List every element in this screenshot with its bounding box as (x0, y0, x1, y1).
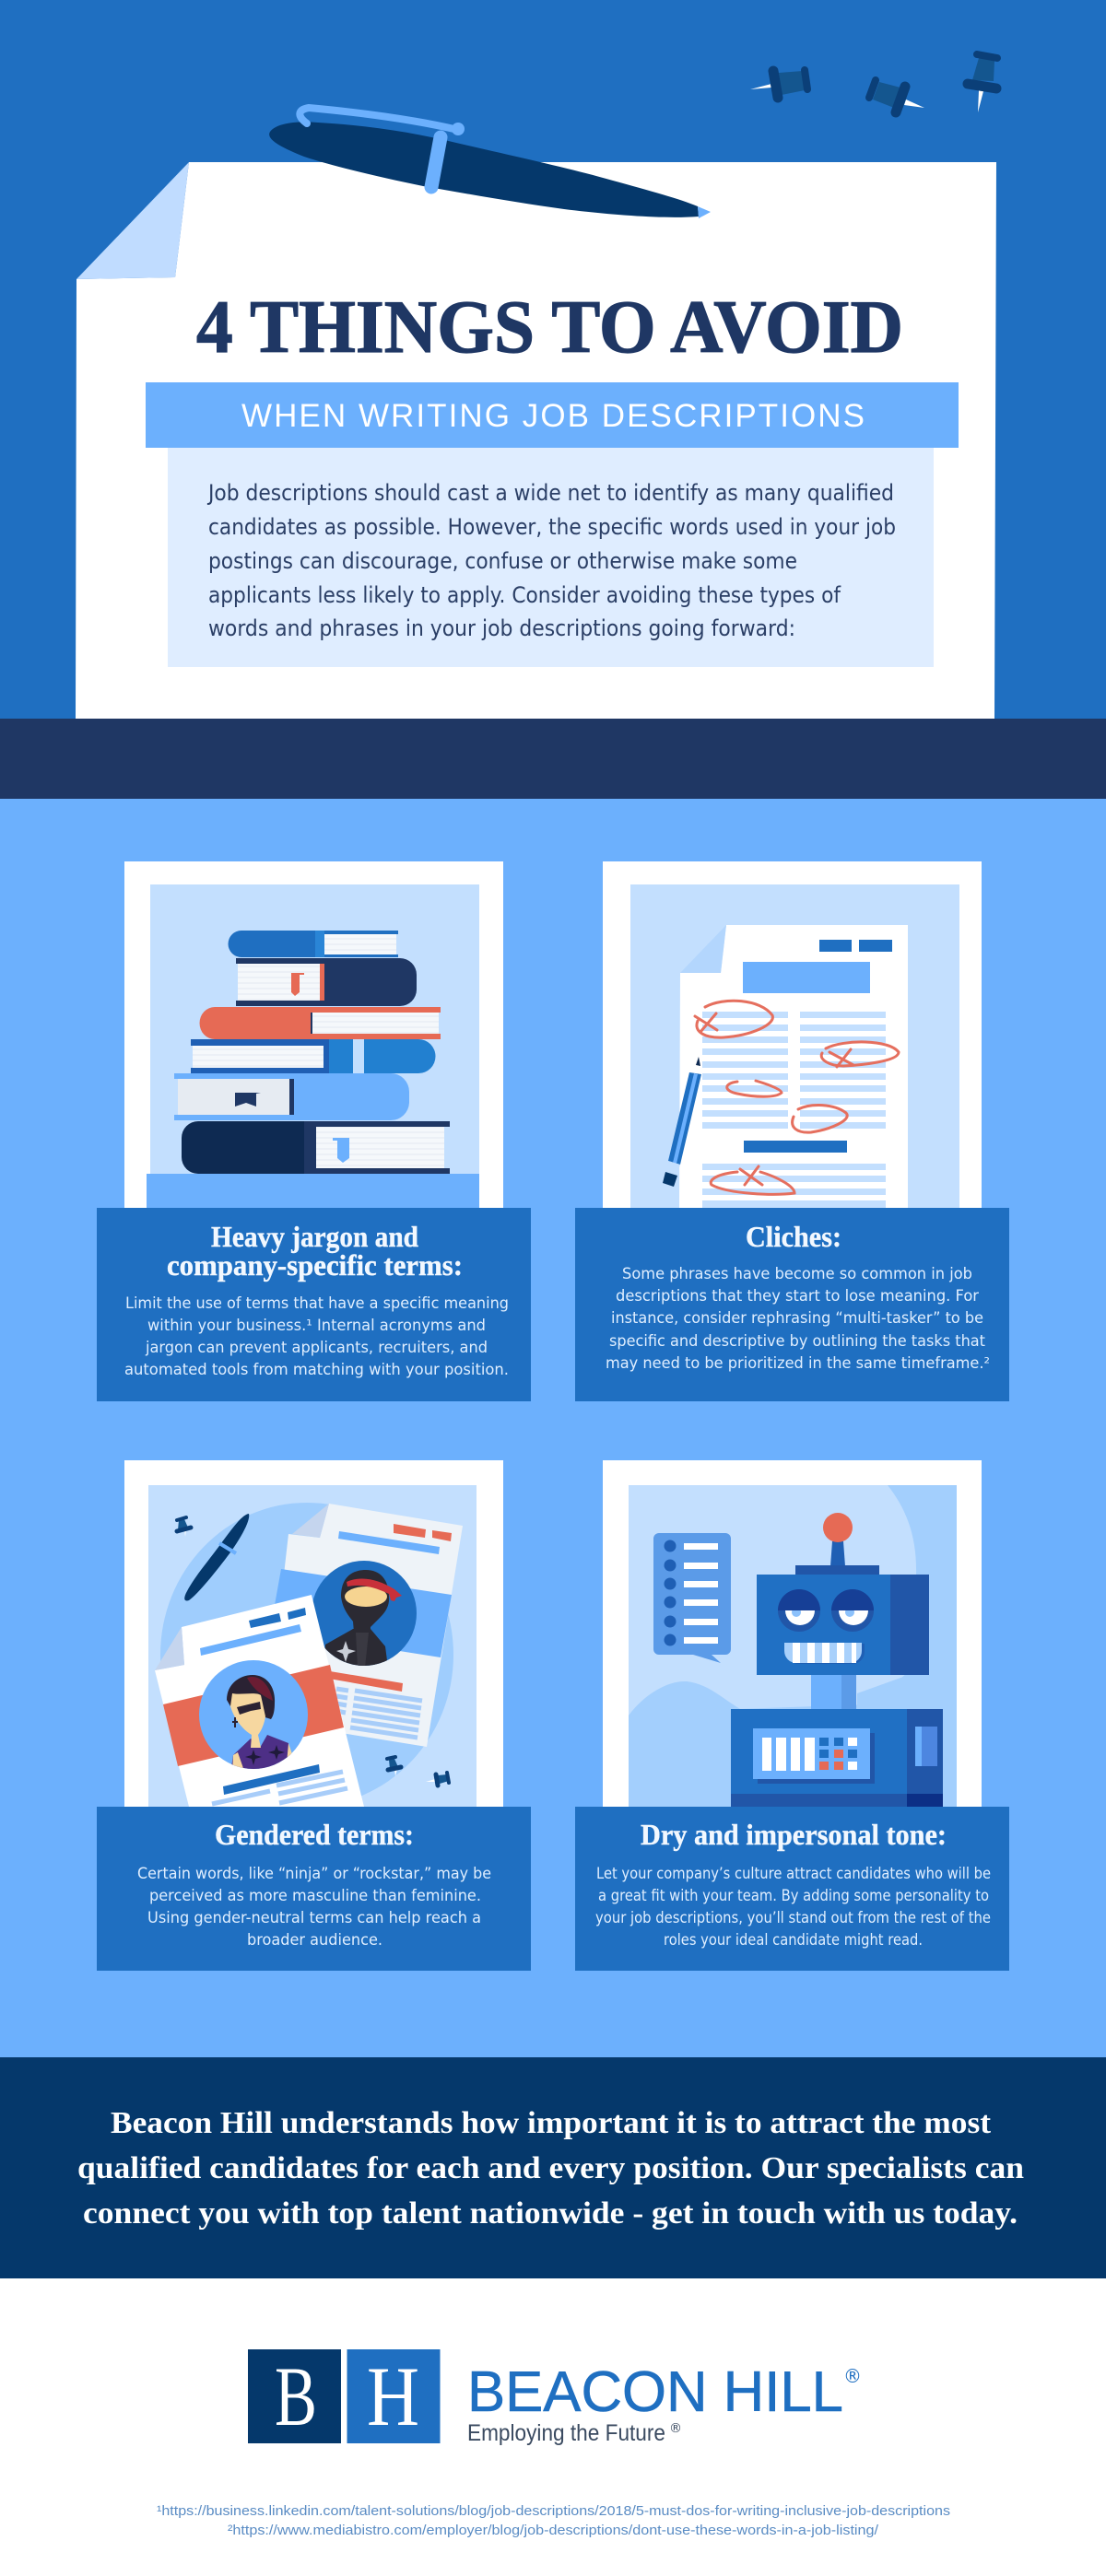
icon: small push pin 3 (426, 1773, 449, 1786)
dark band (0, 719, 1106, 799)
caption: a great fit with your team. By adding some personality to (598, 1887, 989, 1904)
caption: Gendered terms: (215, 1818, 414, 1851)
logo: Beacon Hill: ® (843, 2365, 862, 2387)
robot head (757, 1575, 929, 1675)
caption: instance, consider rephrasing “multi-tasker” to be (611, 1309, 983, 1327)
caption: perceived as more masculine than feminine. (149, 1887, 481, 1904)
footnotes: ¹https://business.linkedin.com/talent-solutions/blog/job-descriptions/2018/5-must-dos-for-writing-inclusive-job-descriptions (157, 2503, 950, 2519)
caption: broader audience. (247, 1931, 382, 1949)
front resume (155, 1595, 364, 1807)
intro text block (168, 448, 934, 667)
back resume (267, 1504, 463, 1747)
call to action band: qualified candidates for each and every position. Our specialists can (77, 2151, 1024, 2185)
call to action band: Beacon Hill understands how important it is to attract the most (111, 2106, 992, 2140)
call to action band (0, 2057, 1106, 2278)
caption: Let your company’s culture attract candidates who will be (596, 1865, 991, 1882)
illustration: robot (629, 1485, 957, 1807)
main light blue section background (0, 799, 1106, 2058)
illustration: resumes (155, 1503, 463, 1807)
icon: pencil (663, 1057, 701, 1187)
illustration: marked up document (663, 925, 908, 1208)
logo: Beacon Hill: Employing the Future (467, 2420, 665, 2446)
caption: Dry and impersonal tone: (641, 1818, 947, 1851)
caption: Using gender-neutral terms can help reach a (147, 1909, 481, 1926)
caption: specific and descriptive by outlining the tasks that (609, 1332, 986, 1350)
caption: roles your ideal candidate might read. (664, 1931, 923, 1949)
caption: descriptions that they start to lose meaning. For (616, 1287, 979, 1305)
caption: your job descriptions, you’ll stand out from the rest of the (595, 1909, 991, 1926)
caption: jargon can prevent applicants, recruiters, and (145, 1339, 488, 1356)
intro text block: postings can discourage, confuse or otherwise make some (208, 548, 797, 574)
logo: Beacon Hill: ® (669, 2421, 682, 2436)
caption: within your business.¹ Internal acronyms and (147, 1317, 486, 1334)
icon: small push pin 2 (387, 1757, 401, 1776)
caption (97, 1807, 531, 1971)
logo: Beacon Hill: B (275, 2349, 317, 2443)
logo: Beacon Hill: BEACON HILL (467, 2360, 843, 2424)
footnotes: ²https://www.mediabistro.com/employer/blog/job-descriptions/dont-use-these-words-in-a-job-listing/ (228, 2523, 879, 2538)
caption: automated tools from matching with your position. (124, 1361, 509, 1378)
robot body (731, 1709, 943, 1807)
icon: push pin 3 (968, 54, 997, 112)
icon: push pin 1 (750, 70, 807, 98)
icon: pen (184, 1514, 249, 1600)
subtitle banner: WHEN WRITING JOB DESCRIPTIONS (241, 398, 865, 434)
caption: Some phrases have become so common in job (622, 1265, 972, 1282)
logo: Beacon Hill (248, 2349, 862, 2446)
red pencil circles (695, 1001, 899, 1194)
footnotes (157, 2503, 950, 2538)
intro text block: words and phrases in your job descriptions going forward: (208, 615, 795, 641)
panel: heavy jargon (97, 861, 531, 1401)
caption: may need to be prioritized in the same timeframe.² (606, 1354, 990, 1372)
speech bubble (653, 1533, 731, 1663)
caption: Cliches: (746, 1220, 841, 1253)
logo: Beacon Hill: H (367, 2349, 419, 2443)
panel: dry and impersonal tone (575, 1460, 1009, 1971)
title: 4 THINGS TO AVOID (196, 285, 903, 369)
caption (575, 1807, 1009, 1971)
caption (575, 1208, 1009, 1401)
icon: push pin 2 (869, 80, 924, 112)
subtitle banner (146, 382, 959, 448)
intro text block: Job descriptions should cast a wide net to identify as many qualified (206, 480, 894, 506)
caption: Limit the use of terms that have a specific meaning (125, 1294, 509, 1312)
icon: stack of books (174, 931, 450, 1174)
icon: pen (269, 108, 711, 218)
call to action band: connect you with top talent nationwide - get in touch with us today. (83, 2196, 1018, 2231)
caption: Heavy jargon and (211, 1220, 418, 1253)
paper sheet (76, 162, 996, 719)
avatar: rockstar (199, 1660, 308, 1774)
icon: small push pin 1 (177, 1517, 191, 1537)
robot neck (811, 1675, 856, 1710)
header section (0, 0, 1106, 720)
avatar: ninja (312, 1561, 417, 1668)
caption: Certain words, like “ninja” or “rockstar,” may be (137, 1865, 491, 1882)
panel: cliches (575, 861, 1009, 1401)
intro text block: candidates as possible. However, the specific words used in your job (208, 514, 896, 540)
caption (97, 1208, 531, 1401)
intro text block: applicants less likely to apply. Consider avoiding these types of (208, 582, 841, 608)
robot antenna (795, 1513, 879, 1575)
panel: gendered terms (97, 1460, 531, 1971)
caption: company-specific terms: (167, 1248, 463, 1282)
